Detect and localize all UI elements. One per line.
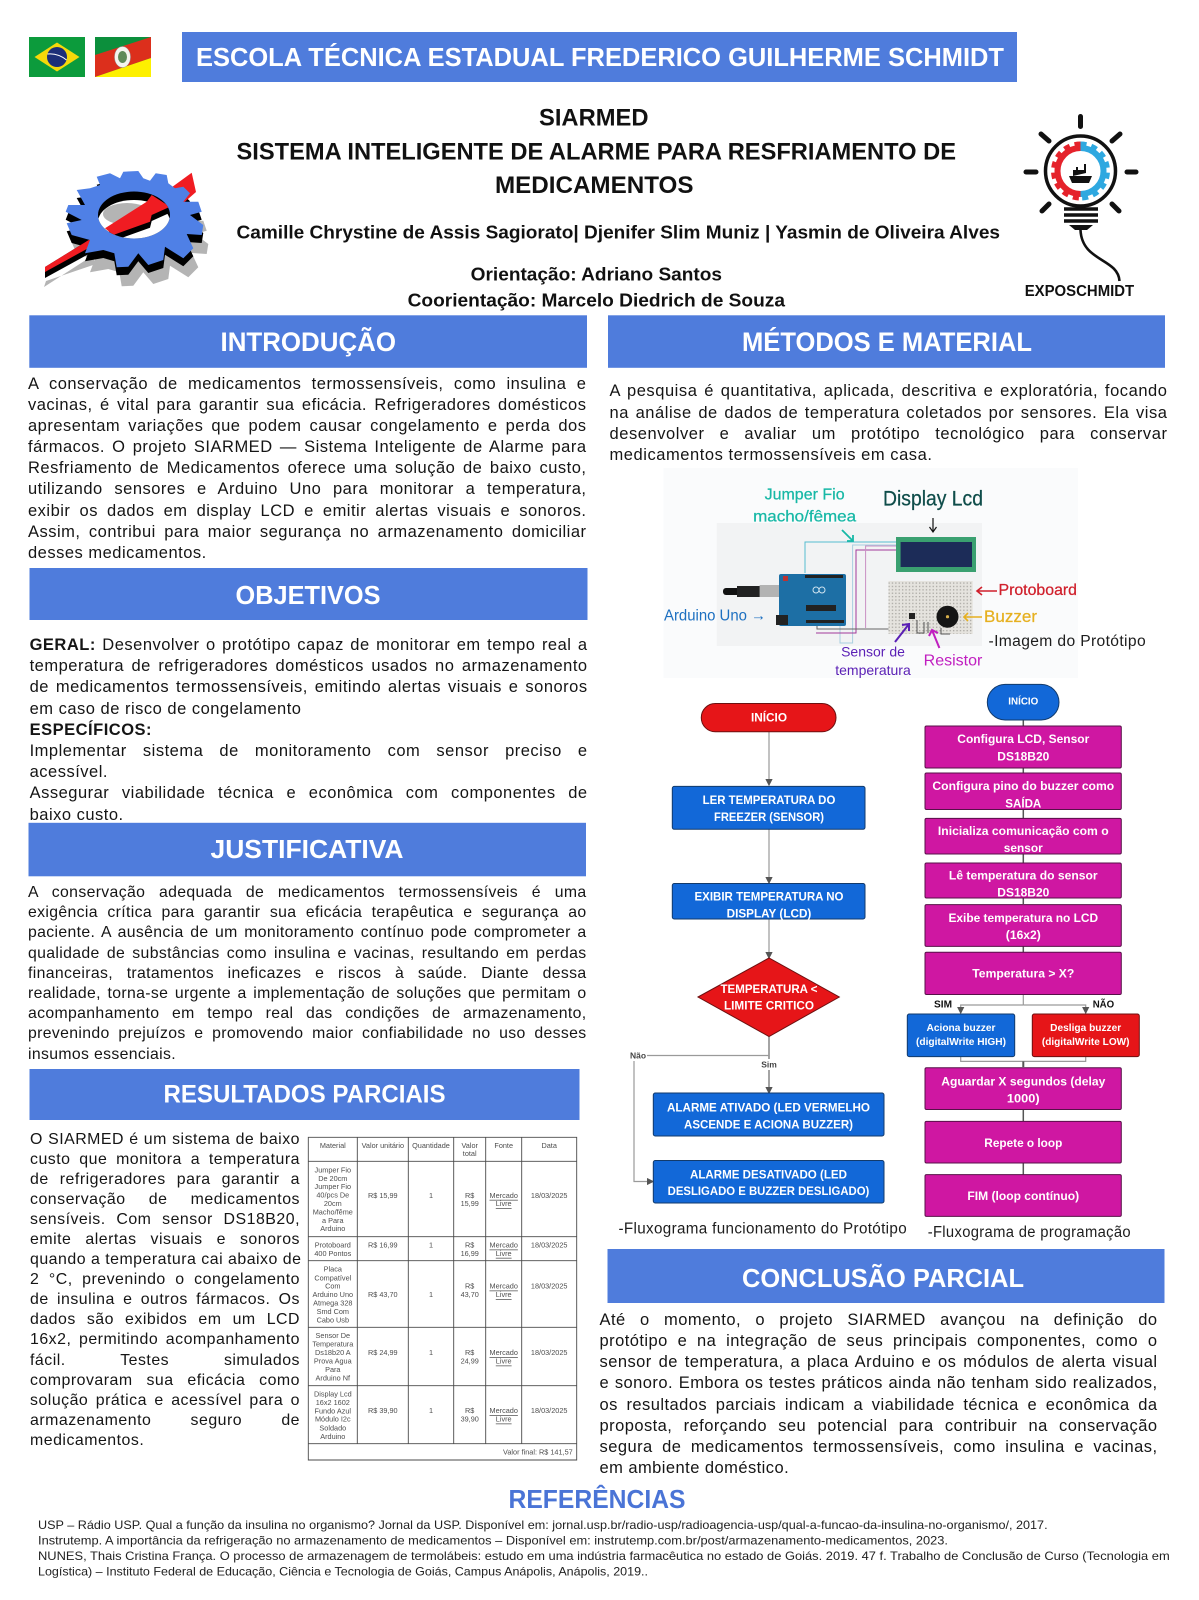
start: [987, 684, 1059, 720]
heading: Resultados Parciais: [30, 1069, 580, 1120]
materials table: Livre: [496, 1249, 512, 1258]
decision: LIMITE CRITICO: [724, 999, 814, 1013]
text block: Introdução: apresentam variações que podem causar congelamento e perda dos: [28, 417, 586, 435]
icon: light bulb EXPOSCHMIDT logo: [1025, 116, 1136, 300]
materials table: R$ 24,99: [368, 1348, 398, 1357]
materials table: Livre: [496, 1414, 512, 1424]
school name banner: ESCOLA TÉCNICA ESTADUAL FREDERICO GUILHERME SCHMIDT: [196, 42, 1004, 72]
heading: Conclusão Parcial: [608, 1249, 1164, 1303]
authors and advisors: [236, 222, 1000, 310]
step 5: (16x2): [1006, 928, 1041, 942]
step: repeat: [925, 1121, 1121, 1163]
text block: Métodos e Material: desenvolver e avaliar um protótipo tecnológico para conservar: [610, 425, 1168, 443]
labels: Arduino Uno →: [664, 608, 766, 624]
materials table: Arduino Nf: [316, 1374, 351, 1382]
text block: Resultados Parciais: 2 °C, prevenindo o congelamento: [30, 1271, 300, 1288]
materials table: R$: [465, 1191, 474, 1200]
text block: Resultados Parciais: O SIARMED é um sistema de baixo: [30, 1130, 300, 1148]
flowchart: prototype operation: [629, 704, 884, 1203]
text block: Conclusão Parcial: segura de medicamentos termossensíveis, como insulina e vacinas,: [600, 1438, 1158, 1456]
heading: Métodos e Material: [608, 315, 1165, 368]
text block: Justificativa: qualidade de substâncias como insulina e vacinas, resultando em perdas: [28, 944, 586, 962]
materials table: R$: [465, 1240, 474, 1250]
buzzer and sensor: [909, 606, 958, 628]
materials table: 20cm: [324, 1199, 342, 1208]
decision: TEMPERATURA <: [720, 982, 818, 996]
branch labels: SIM: [934, 1000, 952, 1010]
text block: Introdução: Resfriamento de Medicamentos oferece uma solução de baixo custo,: [28, 459, 586, 477]
materials table: Macho/fême: [313, 1208, 353, 1216]
labels: temperatura: [835, 662, 911, 678]
step 3: sensor: [1004, 841, 1043, 855]
caption: operation flowchart: -Fluxograma funcionamento do Protótipo: [618, 1220, 907, 1238]
text block: Resultados Parciais: solução prática e acessível para o: [30, 1392, 300, 1409]
materials table: Arduino Uno: [313, 1290, 353, 1299]
step: read temperature: LER TEMPERATURA DO: [703, 793, 835, 807]
labels: Sensor de: [841, 644, 905, 660]
branch labels: [629, 1050, 778, 1070]
text block: Resultados Parciais: quando a temperatura cai abaixo de: [30, 1251, 301, 1268]
text block: Justificativa: financeiras, tratamentos ineficazes e riscos à saúde. Diante dessa: [28, 965, 586, 982]
text block: Resultados Parciais: armazenamento seguro de: [30, 1412, 300, 1429]
text block: Resultados Parciais: sensíveis. Com sensor DS18B20,: [30, 1211, 300, 1228]
text block: Objetivos: Implementar sistema de monitoramento com sensor preciso e: [30, 742, 588, 760]
heading: Objetivos: OBJETIVOS: [236, 580, 380, 610]
text block: Resultados Parciais: [30, 1130, 301, 1449]
materials table: Fonte: [494, 1141, 513, 1150]
step: read temperature: FREEZER (SENSOR): [714, 810, 824, 824]
text block: Objetivos: temperatura de refrigeradores domésticos usados no armazenamento: [30, 657, 588, 675]
step 2: SAÍDA: [1005, 796, 1042, 810]
materials table: 1: [429, 1240, 433, 1250]
materials table: 43,70: [461, 1290, 479, 1299]
icon: gear logo with red arrow: [44, 171, 208, 287]
text block: Introdução: desses medicamentos.: [28, 544, 207, 562]
branch: buzzer on: Aciona buzzer: [926, 1023, 996, 1034]
authors and advisors: Camille Chrystine de Assis Sagiorato| Djenifer Slim Muniz | Yasmin de Oliveira Alves: [236, 222, 1000, 242]
Arduino board with USB cable: [723, 574, 846, 626]
step 4: DS18B20: [997, 886, 1050, 900]
text block: Resultados Parciais: medicamentos.: [30, 1432, 144, 1449]
heading: Introdução: [29, 315, 587, 368]
text block: Conclusão Parcial: Até o momento, o projeto SIARMED avançou na definição do: [600, 1311, 1158, 1329]
step: alarm off: [653, 1160, 884, 1203]
labels: Display Lcd: [883, 488, 983, 510]
branch: buzzer off: Desliga buzzer: [1050, 1023, 1121, 1034]
text block: Objetivos: Assegurar viabilidade técnica e econômica com componentes de: [30, 784, 588, 802]
decision step: [925, 952, 1121, 994]
materials table: total: [463, 1149, 477, 1158]
materials table: De 20cm: [318, 1174, 347, 1183]
materials table: Arduino: [320, 1432, 345, 1441]
materials table: R$ 43,70: [368, 1290, 398, 1299]
step 3: [925, 818, 1121, 855]
text block: Conclusão Parcial: e sonoro. Embora os testes práticos ainda não tenham sido realizados,: [600, 1374, 1158, 1392]
materials table: 24,99: [461, 1356, 479, 1366]
step: alarm off: DESLIGADO E BUZZER DESLIGADO): [668, 1184, 869, 1198]
text block: Resultados Parciais: conservação de medicamentos: [30, 1191, 300, 1208]
materials table: 39,90: [461, 1414, 479, 1424]
materials table: [308, 1137, 577, 1460]
materials table: R$: [465, 1406, 474, 1415]
text block: Resultados Parciais: fácil. Testes simulados: [30, 1352, 300, 1369]
materials table: 18/03/2025: [531, 1191, 567, 1200]
labels: Buzzer: [984, 607, 1037, 626]
materials table: 16x2 1602: [316, 1398, 350, 1407]
step 2: [925, 773, 1121, 810]
branch labels: Não: [630, 1050, 646, 1060]
text block: Introdução: exibir os dados em display LCD e emitir alertas visuais e sonoros.: [28, 502, 586, 520]
text block: Resultados Parciais: 16x2, permitindo acompanhamento: [30, 1331, 300, 1348]
labels: macho/fêmea: [753, 508, 856, 526]
heading: Objetivos: [30, 568, 588, 620]
branch labels: [934, 998, 1114, 1010]
materials table: Compatível: [314, 1273, 352, 1282]
branch: buzzer off: [1032, 1014, 1139, 1057]
materials table: 18/03/2025: [531, 1282, 567, 1290]
materials table: 16,99: [461, 1249, 479, 1258]
text block: Objetivos: GERAL: Desenvolver o protótipo capaz de monitorar em tempo real a: [30, 636, 588, 654]
labels: [664, 486, 1077, 678]
materials table: 18/03/2025: [531, 1348, 567, 1357]
branch labels: Sim: [761, 1060, 777, 1070]
text block: Objetivos: baixo custo.: [30, 806, 124, 824]
icon: light bulb EXPOSCHMIDT logo: EXPOSCHMIDT: [1025, 283, 1135, 300]
flowchart: programming: [907, 684, 1139, 1216]
text block: Métodos e Material: na análise de dados de temperatura coletados por sensores. Ela visa: [610, 404, 1168, 422]
text block: Introdução: fármacos. O projeto SIARMED — Sistema Inteligente de Alarme para: [28, 438, 586, 456]
heading: Justificativa: [28, 823, 586, 876]
heading: Introdução: INTRODUÇÃO: [220, 326, 396, 357]
materials table: 1: [429, 1406, 433, 1415]
branch: buzzer on: (digitalWrite HIGH): [916, 1037, 1006, 1048]
text block: Conclusão Parcial: em ambiente doméstico.: [600, 1459, 789, 1477]
step 5: [925, 905, 1121, 946]
text block: Objetivos: em caso de risco de congelamento: [30, 700, 302, 718]
flag: Brasil: [29, 37, 85, 77]
start: INÍCIO: [751, 710, 787, 724]
materials table: Mercado: [490, 1406, 518, 1415]
materials table: Protoboard: [315, 1240, 351, 1250]
branch: buzzer off: (digitalWrite LOW): [1042, 1037, 1130, 1048]
branch labels: NÃO: [1093, 998, 1114, 1010]
materials table: Jumper Fio: [315, 1166, 351, 1174]
text block: Objetivos: acessível.: [30, 763, 108, 781]
authors and advisors: Coorientação: Marcelo Diedrich de Souza: [408, 290, 786, 310]
references list: [38, 1518, 1170, 1579]
text block: Introdução: utilizando sensores e Arduino Uno para monitorar a temperatura,: [28, 480, 586, 498]
materials table: R$ 15,99: [368, 1191, 398, 1200]
flag: Rio Grande do Sul: [95, 37, 151, 77]
text block: Métodos e Material: A pesquisa é quantitativa, aplicada, descritiva e exploratória, focando: [610, 382, 1168, 400]
text block: Introdução: [28, 375, 586, 562]
caption: prototype image: -Imagem do Protótipo: [988, 633, 1146, 650]
materials table: Temperatura: [312, 1340, 354, 1348]
text block: Resultados Parciais: emite alertas visuais e sonoros: [30, 1231, 300, 1248]
step 5: Exibe temperatura no LCD: [948, 911, 1098, 925]
references list: Instrutemp. A importância da refrigeração no armazenamento de medicamentos – Disponível em: instrutemp.com.br/post/armazenamento-medicamentos, 2023.: [38, 1534, 948, 1548]
step: wait: [925, 1068, 1121, 1110]
labels: Resistor: [924, 652, 983, 670]
step 1: [925, 726, 1121, 768]
materials table: Valor: [461, 1141, 479, 1150]
materials table: Valor final: R$ 141,57: [503, 1448, 573, 1456]
materials table: Display Lcd: [314, 1390, 352, 1398]
materials table: 18/03/2025: [531, 1406, 567, 1415]
materials table: R$: [465, 1348, 474, 1357]
step 2: Configura pino do buzzer como: [932, 779, 1114, 793]
materials table: Placa: [324, 1264, 343, 1274]
text block: Resultados Parciais: de insulina e outros fármacos. Os: [30, 1291, 300, 1308]
step: wait: Aguardar X segundos (delay: [941, 1074, 1106, 1088]
materials table: Módulo I2c: [315, 1414, 351, 1424]
materials table: 1: [429, 1348, 433, 1357]
step: display temperature: EXIBIR TEMPERATURA NO: [694, 890, 844, 904]
text block: Objetivos: [30, 636, 588, 824]
materials table: Quantidade: [412, 1141, 450, 1150]
project title: SIARMED: [539, 104, 648, 132]
materials table: Fundo Azul: [315, 1406, 351, 1416]
materials table: 400 Pontos: [314, 1249, 352, 1258]
step 1: Configura LCD, Sensor: [957, 732, 1090, 746]
branch: buzzer on: [907, 1014, 1015, 1057]
materials table: R$ 39,90: [368, 1406, 398, 1415]
materials table: R$ 16,99: [368, 1240, 398, 1250]
text block: Conclusão Parcial: proposta, reforçando seu potencial para contribuir na conservação: [600, 1417, 1158, 1435]
step: end: FIM (loop contínuo): [967, 1189, 1079, 1203]
step: display temperature: [672, 884, 865, 921]
materials table: Atmega 328: [313, 1298, 352, 1308]
LCD display: [896, 537, 976, 572]
materials table: Data: [541, 1141, 558, 1150]
materials table: 1: [429, 1191, 433, 1200]
text block: Conclusão Parcial: [600, 1311, 1158, 1477]
text block: Objetivos: de medicamentos termossensíveis, emitindo alertas visuais e sonoros: [30, 678, 588, 696]
references list: Logística) – Instituto Federal de Educação, Ciência e Tecnologia de Goiás, Campus Anápolis, Anápolis, 2019..: [38, 1565, 648, 1579]
materials table: Prova Agua: [314, 1356, 353, 1366]
decision step: Temperatura > X?: [972, 967, 1074, 981]
references list: USP – Rádio USP. Qual a função da insulina no organismo? Jornal da USP. Disponível em: jornal.usp.br/radio-usp/radioagencia-usp/qual-a-funcao-da-insulina-no-organismo/, 2017.: [38, 1518, 1048, 1532]
materials table: Cabo Usb: [317, 1316, 349, 1324]
text block: Justificativa: realidade, torna-se urgente a implementação de soluções que permitam o: [28, 985, 586, 1002]
materials table: Com: [325, 1282, 341, 1290]
text block: Objetivos: ESPECÍFICOS:: [30, 721, 152, 739]
text block: Justificativa: A conservação adequada de medicamentos termossensíveis é uma: [28, 884, 586, 901]
step: read temperature: [672, 786, 865, 829]
text block: Introdução: Assim, contribui para maior segurança no armazenamento domiciliar: [28, 523, 586, 541]
materials table: Jumper Fio: [315, 1182, 351, 1191]
labels: Protoboard: [998, 582, 1077, 599]
materials table: Material: [320, 1141, 346, 1150]
materials table: 40/pcs De: [316, 1190, 349, 1200]
connectors: [634, 732, 769, 1182]
step: alarm off: ALARME DESATIVADO (LED: [690, 1167, 847, 1181]
materials table: Sensor De: [316, 1331, 350, 1340]
materials table: Livre: [496, 1356, 512, 1366]
step: wait: 1000): [1007, 1091, 1040, 1105]
text block: Justificativa: insumos essenciais.: [28, 1046, 176, 1063]
text block: Resultados Parciais: custo que monitora a temperatura: [30, 1151, 300, 1168]
materials table: Para: [325, 1365, 341, 1374]
caption: programming flowchart: -Fluxograma de programação: [928, 1224, 1131, 1241]
text block: Introdução: vacinas, é vital para garantir sua eficácia. Refrigeradores domésticos: [28, 396, 586, 414]
text block: Conclusão Parcial: sensor de temperatura, a placa Arduino e os módulos de alerta visual: [600, 1353, 1158, 1371]
text block: Métodos e Material: [610, 382, 1168, 464]
heading: Métodos e Material: MÉTODOS E MATERIAL: [742, 326, 1032, 357]
step: end: [925, 1175, 1121, 1216]
materials table: Mercado: [490, 1348, 518, 1357]
project title: [236, 104, 956, 199]
step 3: Inicializa comunicação com o: [938, 824, 1109, 838]
text block: Introdução: A conservação de medicamentos termossensíveis, como insulina e: [28, 375, 586, 393]
step: alarm on: ALARME ATIVADO (LED VERMELHO: [667, 1100, 870, 1114]
materials table: Mercado: [490, 1240, 518, 1250]
materials table: R$: [465, 1282, 474, 1290]
project title: MEDICAMENTOS: [495, 172, 694, 199]
text block: Resultados Parciais: dados são exibidos em um LCD: [30, 1311, 300, 1328]
school name banner: [182, 32, 1017, 82]
project title: SISTEMA INTELIGENTE DE ALARME PARA RESFRIAMENTO DE: [236, 138, 956, 166]
materials table: 15,99: [461, 1199, 479, 1208]
step: alarm on: [653, 1093, 884, 1136]
materials table: Valor unitário: [362, 1141, 404, 1150]
text block: Métodos e Material: medicamentos termossensíveis em casa.: [610, 446, 932, 464]
text block: Conclusão Parcial: os resultados parciais indicam a viabilidade técnica e econômica da: [600, 1396, 1158, 1414]
text block: Justificativa: prevenindo prejuízos e promovendo maior confiabilidade no uso desses: [28, 1025, 586, 1042]
heading: Resultados Parciais: RESULTADOS PARCIAIS: [164, 1080, 446, 1108]
text block: Justificativa: [28, 884, 586, 1063]
heading: Justificativa: JUSTIFICATIVA: [210, 834, 404, 864]
materials table: a Para: [322, 1216, 344, 1225]
materials table: Ds18b20 A: [315, 1348, 351, 1357]
prototype circuit image: [664, 468, 1078, 678]
text block: Justificativa: acompanhamento em tempo real das condições de armazenamento,: [28, 1005, 586, 1022]
step: repeat: Repete o loop: [984, 1136, 1062, 1150]
step 1: DS18B20: [997, 750, 1050, 764]
step: display temperature: DISPLAY (LCD): [727, 907, 811, 921]
materials table: Smd Com: [317, 1307, 349, 1316]
start: [701, 704, 836, 732]
materials table: Arduino: [320, 1224, 345, 1233]
decision: [698, 958, 839, 1036]
materials table: 18/03/2025: [531, 1240, 567, 1250]
references list: NUNES, Thais Cristina França. O processo de armazenagem de termolábeis: estudo em uma indústria farmacêutica no estado de Goiás. 2019. 47 f. Trabalho de Conclusão de Curso (Tecnologia em: [38, 1549, 1170, 1563]
breadboard: [888, 581, 973, 634]
start: INÍCIO: [1008, 694, 1039, 708]
text block: Justificativa: paciente. A ausência de um monitoramento contínuo pode comprometer a: [28, 924, 586, 941]
heading: Conclusão Parcial: CONCLUSÃO PARCIAL: [742, 1263, 1024, 1293]
materials table: Mercado: [490, 1282, 518, 1290]
step 4: Lê temperatura do sensor: [949, 869, 1098, 883]
text block: Resultados Parciais: de refrigeradores para garantir a: [30, 1171, 300, 1188]
labels: Jumper Fio: [765, 486, 845, 504]
text block: Resultados Parciais: comprovaram sua eficácia como: [30, 1372, 300, 1389]
materials table: Livre: [496, 1290, 512, 1299]
step 4: [925, 863, 1121, 900]
materials table: 1: [429, 1290, 433, 1299]
connectors: [961, 720, 1086, 1174]
text block: Justificativa: exigência crítica para garantir sua eficácia terapêutica e segurança ao: [28, 904, 586, 921]
heading: Referências: REFERÊNCIAS: [508, 1484, 686, 1514]
text block: Conclusão Parcial: protótipo e na integração de seus principais componentes, como o: [600, 1332, 1158, 1350]
materials table: Mercado: [490, 1191, 518, 1200]
materials table: Livre: [496, 1199, 512, 1208]
authors and advisors: Orientação: Adriano Santos: [471, 264, 722, 284]
materials table: Soldado: [319, 1424, 346, 1432]
step: alarm on: ASCENDE E ACIONA BUZZER): [684, 1118, 853, 1132]
